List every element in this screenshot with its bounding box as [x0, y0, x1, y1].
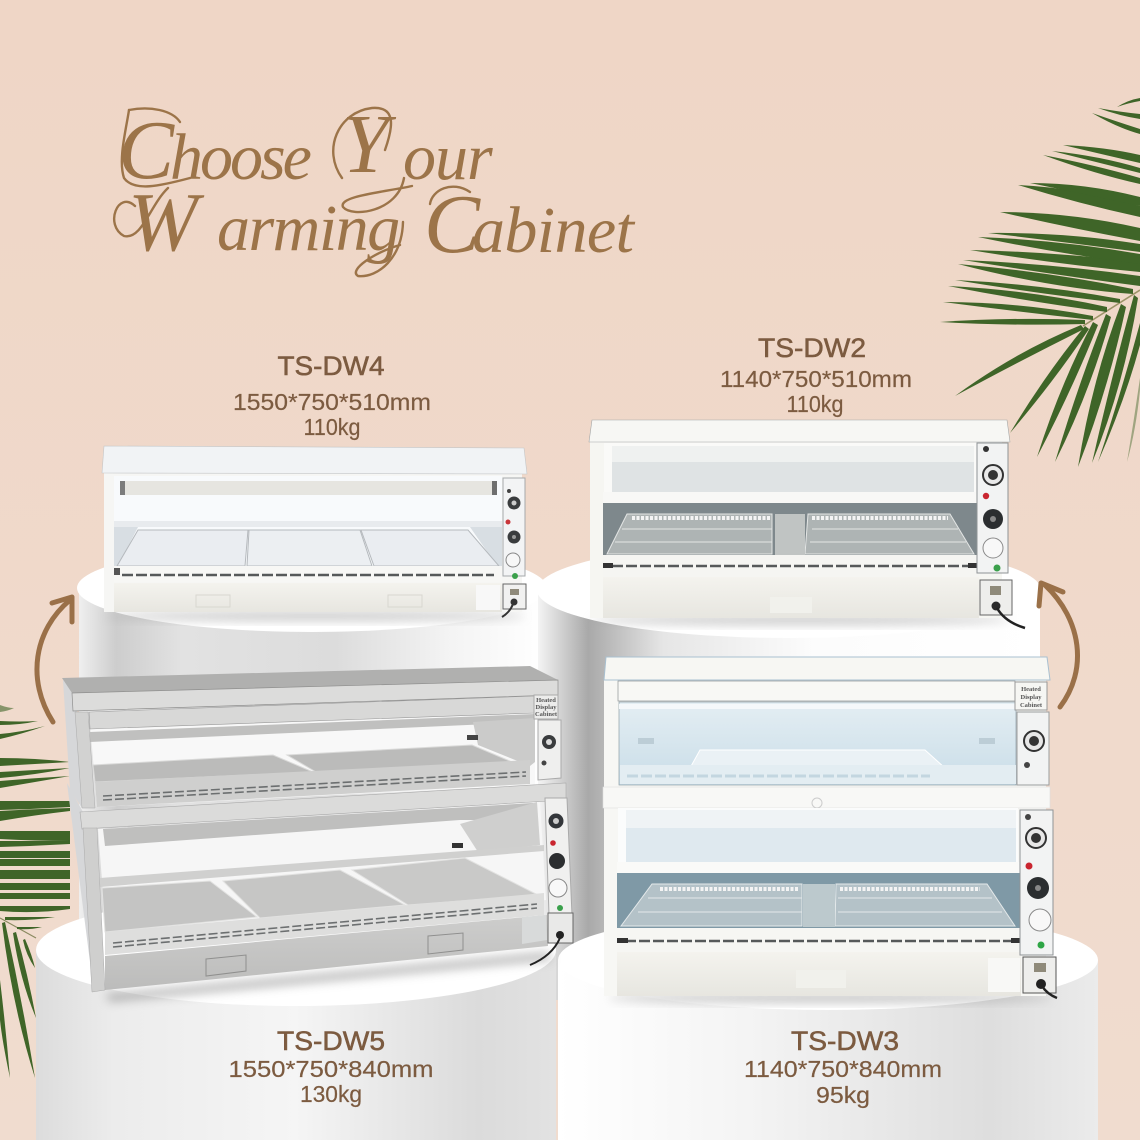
cabinet: TS-DW2 [589, 420, 1025, 628]
vent [114, 566, 502, 582]
lid [102, 446, 527, 474]
upper back [89, 698, 535, 807]
lower controls [1020, 810, 1053, 955]
lower rail [100, 845, 544, 887]
lower back [98, 802, 546, 945]
upper glass [619, 702, 1016, 785]
side glass [114, 527, 138, 570]
title: abinet [472, 194, 636, 267]
name plate: Display [1021, 694, 1042, 701]
pedestal: top left [77, 544, 547, 1000]
upper vent [95, 760, 530, 807]
name plate: Heated [1021, 686, 1041, 693]
shelf [603, 492, 978, 503]
title: C [424, 178, 481, 271]
interior [603, 503, 978, 555]
label: TS-DW5 [228, 1026, 434, 1107]
base [603, 577, 979, 618]
upper fascia [89, 696, 535, 729]
cabinet: TS-DW5 [62, 666, 573, 1002]
glass [604, 443, 978, 493]
title: our [403, 121, 493, 194]
wire trays [607, 514, 772, 554]
lid [589, 420, 1010, 442]
upper controls [1017, 712, 1049, 785]
label: TS-DW5: 130kg [300, 1081, 362, 1107]
title: Y [342, 98, 397, 191]
interior [617, 873, 1020, 931]
left side panels [63, 680, 82, 808]
shelf [114, 521, 502, 527]
cabinet: TS-DW4 [102, 446, 527, 621]
cabinet: TS-DW3 [603, 657, 1057, 1003]
label: TS-DW4: 110kg [304, 414, 360, 440]
upper inner wall [473, 718, 535, 766]
name plate [534, 695, 558, 719]
lid [604, 657, 1050, 680]
base [114, 583, 502, 612]
title [114, 98, 636, 276]
label: TS-DW5: TS-DW5 [277, 1026, 385, 1056]
pedestal: bottom left [36, 894, 556, 1140]
heat lamp bar [120, 481, 497, 495]
name plate: Display [536, 704, 557, 711]
pedestal: top right [537, 542, 1041, 1000]
power box [1023, 957, 1056, 993]
base [105, 915, 548, 990]
upper trays [93, 755, 313, 782]
palm leaf: top right [940, 98, 1140, 467]
name plate [1015, 682, 1047, 710]
power box [980, 580, 1012, 615]
wire trays [621, 884, 802, 926]
upper post [75, 712, 95, 808]
label: TS-DW2: 1140*750*510mm [720, 366, 912, 392]
lower controls [545, 798, 572, 915]
label: TS-DW3: 95kg [816, 1082, 870, 1108]
trays [117, 530, 248, 566]
name plate: Cabinet [1020, 702, 1043, 709]
palm leaf: bottom left [0, 705, 70, 1078]
label: TS-DW5: 1550*750*840mm [228, 1056, 434, 1082]
arrow: right [1039, 583, 1078, 707]
name plate: Heated [536, 697, 556, 704]
vent [603, 555, 979, 577]
power box [548, 913, 573, 943]
title: C [118, 104, 175, 197]
power box [503, 584, 526, 609]
interior [114, 476, 502, 580]
title: arming [217, 192, 414, 265]
arrow: left [37, 597, 72, 722]
middle band [80, 783, 566, 829]
label: TS-DW2 [720, 333, 912, 417]
pedestal: bottom right [558, 910, 1098, 1140]
label: TS-DW4: 1550*750*510mm [233, 389, 431, 415]
label: TS-DW2: 110kg [786, 391, 844, 417]
base [617, 952, 1021, 996]
lower glass [618, 808, 1018, 864]
middle band [603, 787, 1050, 808]
lower post [83, 828, 105, 992]
shelf [617, 862, 1020, 873]
vent [617, 928, 1021, 952]
lower trays [102, 881, 257, 932]
lower vent [105, 893, 544, 955]
label: TS-DW3: 1140*750*840mm [744, 1056, 942, 1082]
upper lamp rail [90, 714, 535, 742]
control panel [977, 443, 1008, 573]
name plate: Cabinet [535, 711, 558, 718]
label: TS-DW4: TS-DW4 [278, 351, 384, 381]
upper controls [538, 720, 561, 780]
lower inner wall [460, 802, 540, 852]
label: TS-DW2: TS-DW2 [758, 333, 866, 363]
upper band [72, 680, 558, 711]
title: hoose [170, 121, 322, 194]
label: TS-DW3: TS-DW3 [791, 1026, 899, 1056]
label: TS-DW4 [233, 351, 431, 440]
upper band [618, 681, 1015, 701]
title: W [128, 176, 205, 269]
control panel [503, 478, 525, 576]
label: TS-DW3 [744, 1026, 942, 1108]
lid [62, 666, 558, 693]
lower fascia [103, 803, 533, 846]
